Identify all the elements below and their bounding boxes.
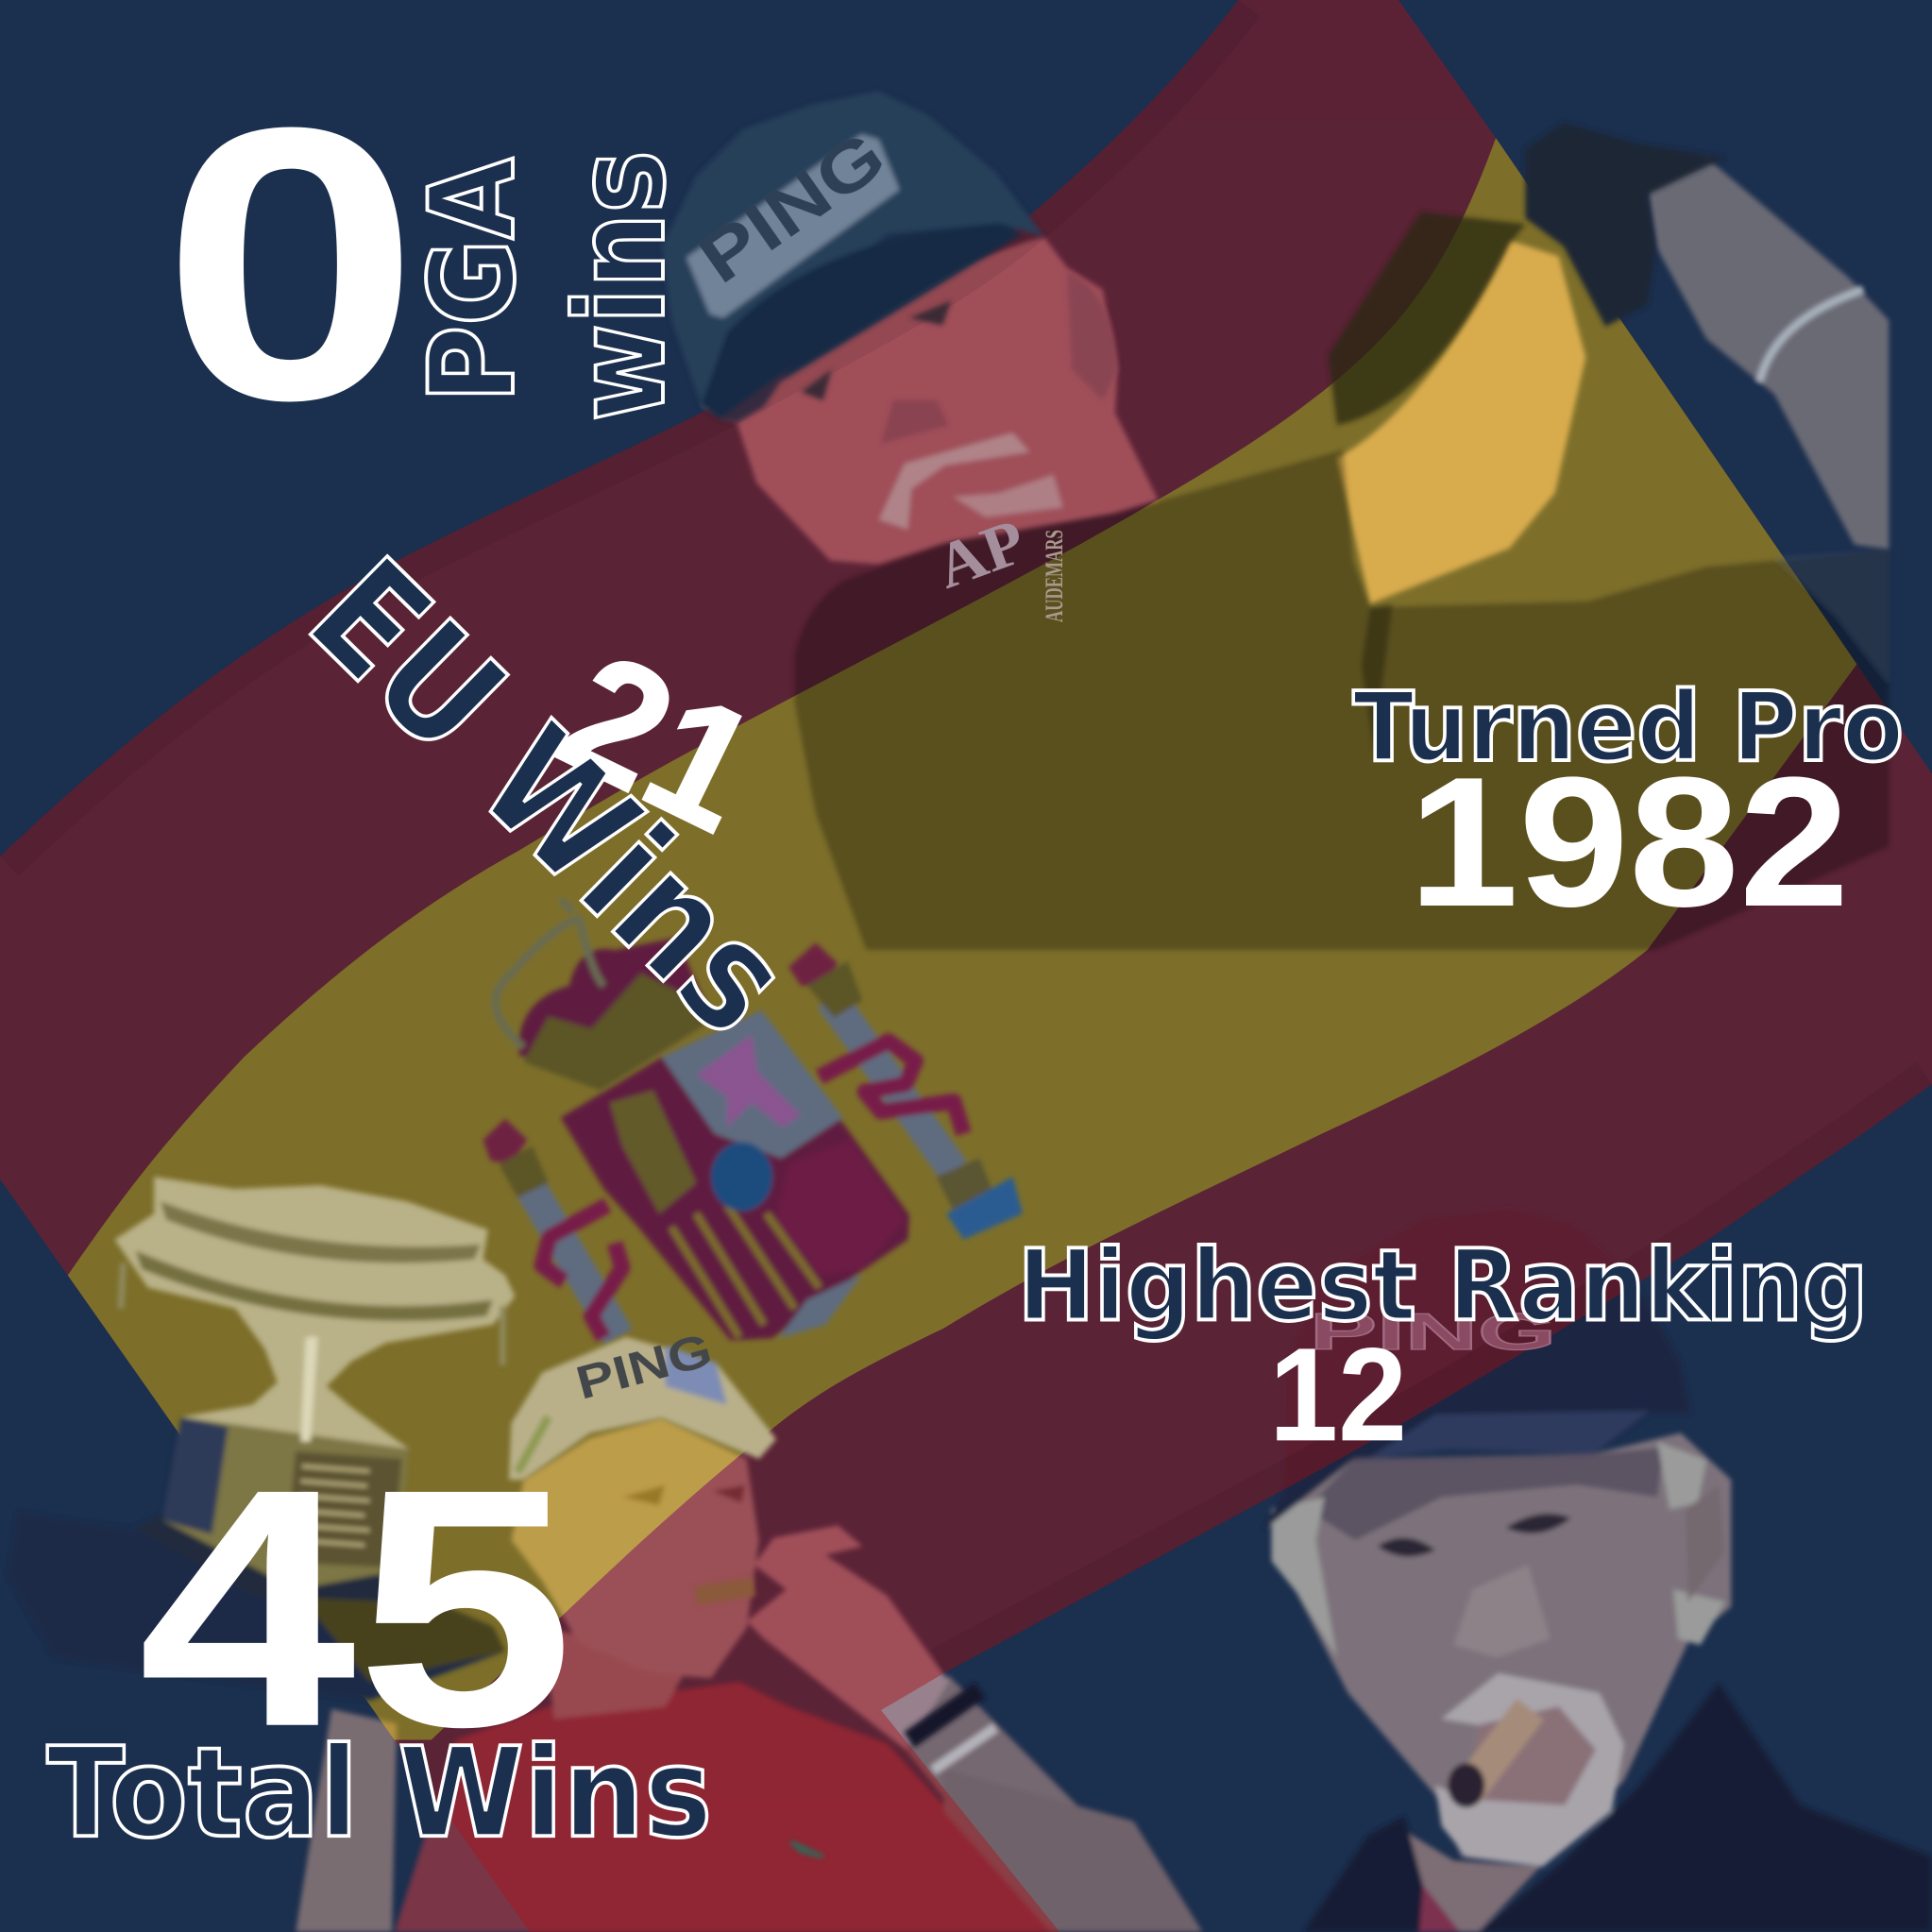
golfer one right glove bbox=[1525, 123, 1725, 327]
golfer one upper arm bbox=[1648, 158, 1889, 550]
golfer three cigar tip bbox=[1448, 1763, 1484, 1807]
golfer three nose bbox=[1454, 1565, 1550, 1657]
trophy handles bbox=[121, 1263, 502, 1365]
number 21: 21 bbox=[534, 617, 784, 868]
granada bbox=[779, 1274, 862, 1338]
label PGA: PGA bbox=[405, 158, 541, 403]
crown base bbox=[524, 974, 708, 1091]
ribbons bbox=[542, 1042, 963, 1338]
trophy base ring bbox=[136, 1509, 395, 1602]
golfer one nose bbox=[881, 400, 949, 444]
golfer three ear bbox=[1686, 1484, 1725, 1602]
golfer one shirt over red bbox=[795, 449, 1889, 950]
trophy rim band bbox=[161, 1201, 481, 1263]
golfer two hand bbox=[747, 1525, 949, 1750]
lion bbox=[696, 1035, 801, 1127]
golfer two cap blue edge bbox=[666, 1346, 727, 1405]
coat of arms bbox=[483, 900, 1023, 1341]
logo: PING on cap three: PING bbox=[1310, 1302, 1556, 1361]
golfer one under bill bbox=[701, 223, 1023, 419]
golfer one shirt over sky bbox=[1774, 550, 1889, 684]
stripes bbox=[671, 1205, 820, 1337]
golfer two cap green stripe bbox=[517, 1417, 549, 1472]
trophy plaque bbox=[286, 1451, 401, 1568]
golfer two shirt bbox=[395, 1682, 1059, 1932]
golfer two cap bbox=[509, 1337, 776, 1480]
golfer one arm sleeve bbox=[1337, 240, 1585, 603]
golfer one mustache bbox=[878, 432, 1030, 530]
golfer two face bbox=[512, 1418, 759, 1678]
golfer one face bbox=[701, 237, 1159, 565]
number 1982: 1982 bbox=[1408, 739, 1850, 945]
right pillar bbox=[830, 998, 954, 1171]
trophy plaque lines bbox=[296, 1466, 369, 1545]
logo: PING on cap one: PING bbox=[686, 117, 899, 298]
golfer three cap bbox=[1263, 1209, 1690, 1531]
label Highest Ranking: Highest Ranking bbox=[1018, 1228, 1868, 1343]
trophy bowl band bbox=[136, 1250, 493, 1321]
golfer two watch bbox=[909, 1690, 979, 1739]
trophy highlight bbox=[300, 1337, 318, 1442]
trophy barrel bbox=[162, 1417, 409, 1589]
blue center bbox=[711, 1143, 772, 1212]
golfer two wrist bands bbox=[933, 1727, 995, 1771]
golfer three neck bbox=[1392, 1823, 1540, 1932]
golfer one left glove bbox=[1329, 212, 1525, 425]
left pillar bbox=[530, 1187, 619, 1337]
golfer three lips bbox=[1466, 1706, 1596, 1805]
flag yellow band bbox=[68, 138, 1856, 1739]
golfer three hair bbox=[1272, 1442, 1725, 1657]
stat: 45 Total Wins bbox=[47, 1419, 712, 1866]
photo: golfer skin layers under the flag bbox=[296, 158, 1932, 1932]
pillar base bbox=[937, 1159, 991, 1213]
golfer three collar bbox=[1419, 1885, 1460, 1932]
stat: 0 PGA wins bbox=[161, 47, 692, 481]
golfer one eyes bbox=[801, 300, 951, 400]
golfer three cigar bbox=[1466, 1709, 1531, 1793]
golfer three arm bbox=[944, 1770, 1203, 1932]
castle bbox=[610, 1091, 696, 1213]
golfer one under bill over flag bbox=[720, 324, 850, 423]
golfer three shirt bbox=[1304, 1683, 1932, 1932]
number 12: 12 bbox=[1269, 1319, 1407, 1468]
trophy bowl bbox=[114, 1177, 515, 1449]
golfer one cap bbox=[662, 92, 1043, 419]
logo: shirt sponsor: AUDEMARS bbox=[1041, 530, 1068, 622]
golfer two eyes bbox=[622, 1484, 745, 1506]
golfer three head bbox=[1272, 1433, 1731, 1867]
trophy barrel left shade bbox=[162, 1417, 228, 1534]
crown arches bbox=[496, 900, 603, 1047]
stat: Turned Pro 1982 bbox=[1353, 672, 1904, 945]
number 0: 0 bbox=[161, 47, 420, 481]
label Total Wins: Total Wins bbox=[47, 1721, 712, 1866]
golfer one shirt shadow bbox=[1362, 603, 1392, 752]
pillar capitals bbox=[483, 942, 838, 1164]
logo: PING on cap two: PING bbox=[570, 1323, 718, 1410]
shield bbox=[561, 1010, 909, 1341]
label Turned Pro: Turned Pro bbox=[1353, 672, 1904, 784]
golfer one arm band bbox=[1759, 290, 1863, 382]
golfer two neck bbox=[542, 1626, 690, 1719]
label wins: wins bbox=[549, 150, 692, 421]
stat: 21 EU Wins bbox=[277, 526, 823, 1068]
navarre quarter bbox=[776, 1140, 906, 1276]
pillar capital collars bbox=[499, 961, 862, 1197]
trophy base right side bbox=[290, 1584, 505, 1682]
golfer one chin beard bbox=[953, 474, 1063, 517]
logo: sponsor mark on shirt: AP bbox=[927, 505, 1035, 602]
stat: Highest Ranking 12 bbox=[1018, 1228, 1868, 1468]
golfer two forearm bbox=[881, 1676, 1203, 1932]
silver quarter bbox=[662, 1010, 843, 1159]
golfer one ear bbox=[1067, 271, 1117, 400]
golfer two cigar bbox=[696, 1587, 754, 1596]
number 45: 45 bbox=[138, 1419, 574, 1798]
label EU Wins: EU Wins bbox=[277, 526, 823, 1068]
golfer three cap bill bbox=[1367, 1411, 1650, 1459]
golfer two logo bbox=[791, 1842, 823, 1856]
pillar waves bbox=[946, 1177, 1023, 1240]
golfer three beard bbox=[1435, 1673, 1624, 1867]
crown bbox=[518, 938, 708, 1083]
golfer two left arm bbox=[296, 1709, 397, 1932]
golfer three forehead shadow bbox=[1306, 1448, 1664, 1540]
golfer one cap patch bbox=[686, 134, 900, 318]
trophy base bbox=[8, 1513, 505, 1701]
trophy bbox=[8, 1177, 515, 1701]
golfer three eyes bbox=[1378, 1514, 1571, 1556]
flag edge shading bbox=[740, 238, 1044, 422]
